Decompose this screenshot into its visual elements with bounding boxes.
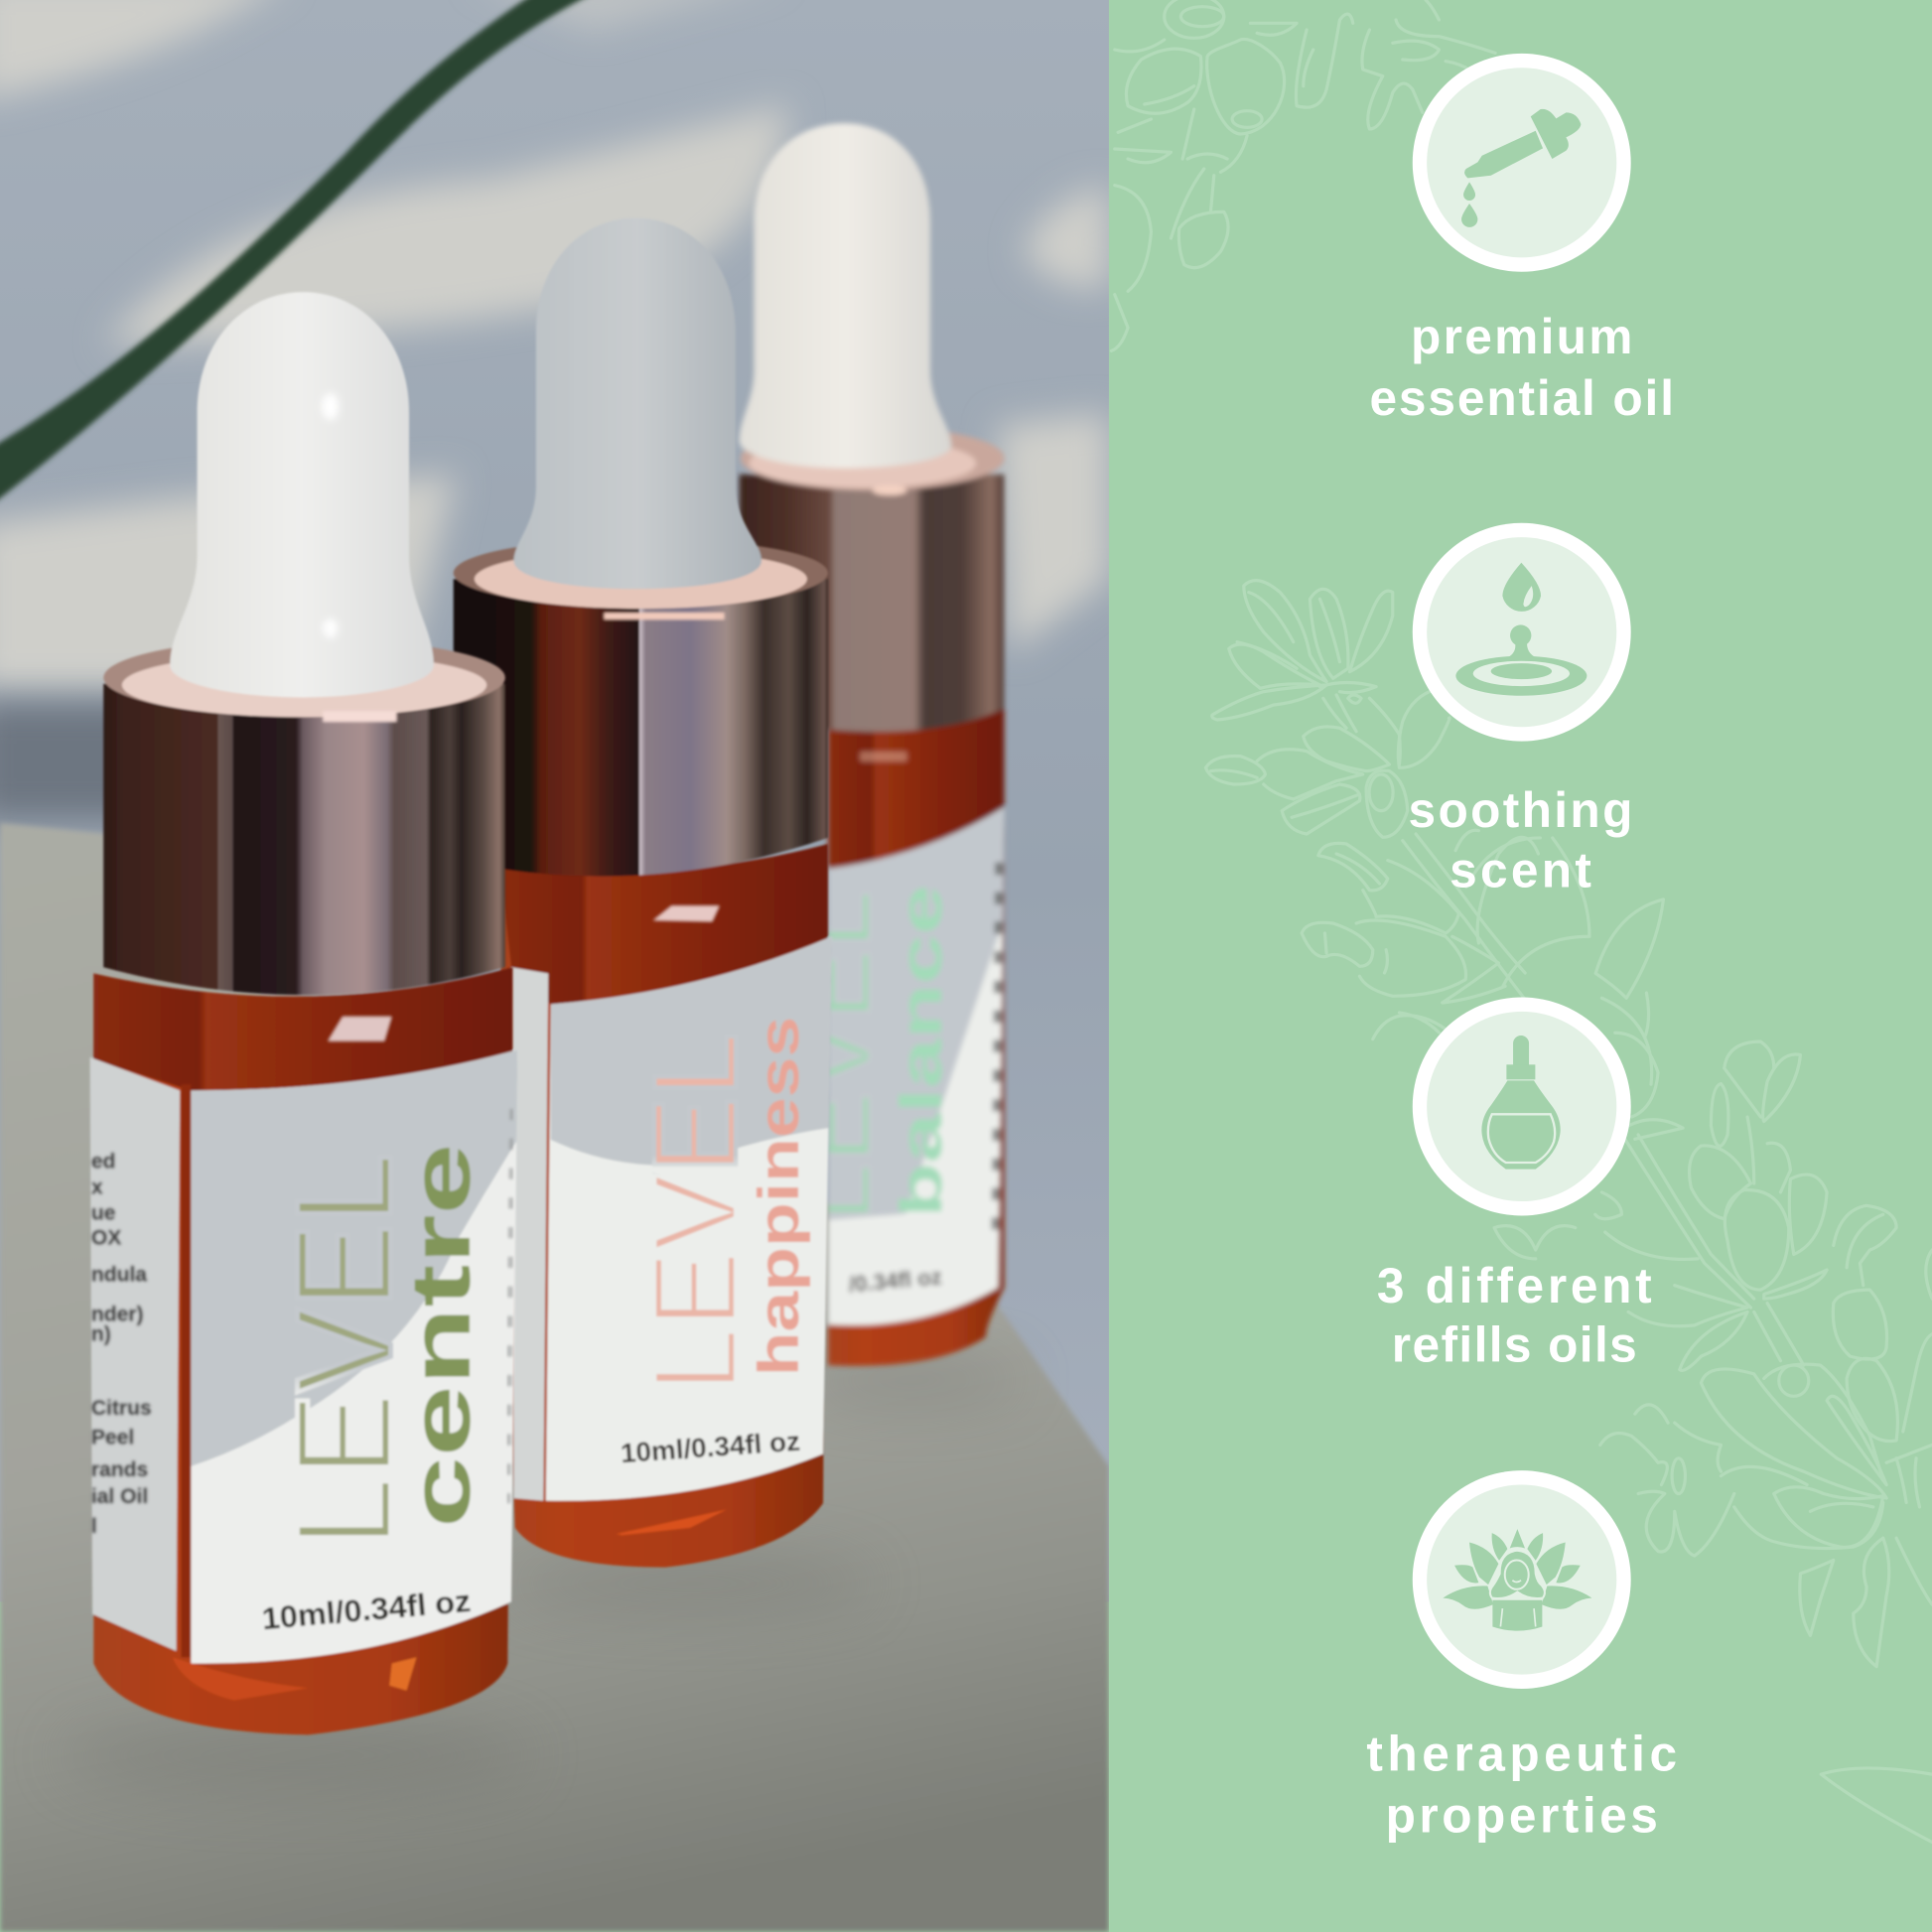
- front bottle edge text: [507, 1109, 512, 1503]
- green background: [1109, 0, 1932, 1932]
- front bottle side label text: nder): [91, 1303, 144, 1325]
- label: [1369, 309, 1674, 426]
- label: premium: [1411, 309, 1632, 364]
- floral line art: [1111, 0, 1932, 1842]
- back bottle label shadow: [828, 807, 1004, 1220]
- front bottle side label text: rands: [91, 1458, 148, 1481]
- front bottle side label text: Citrus: [91, 1397, 152, 1420]
- middle bottle volume: 10ml/0.34fl oz: [620, 1426, 801, 1468]
- middle branch: [1205, 581, 1538, 1039]
- badge circle: [1413, 998, 1631, 1215]
- front bottle side label text: ue: [91, 1202, 115, 1225]
- badge circle: [1413, 1470, 1631, 1689]
- front bottle glints: [328, 1017, 392, 1041]
- label: properties: [1386, 1787, 1658, 1843]
- benefit: 3 different refills oils: [1377, 998, 1652, 1372]
- front bottle side label text: ial Oil: [91, 1485, 148, 1508]
- branch upper right petals: [1466, 838, 1663, 1084]
- label: [1366, 1725, 1677, 1843]
- badge circle: [1413, 523, 1631, 742]
- label: refills oils: [1392, 1316, 1637, 1372]
- back bottle label text: [828, 860, 1007, 1295]
- back bottle glass: [824, 859, 1009, 1370]
- middle bottle side label: [511, 967, 548, 1501]
- middle bottle cap: [454, 579, 828, 877]
- front bottle side label text: [91, 1151, 152, 1538]
- middle bottle brand text: LEVEL: [629, 1033, 761, 1392]
- label: [1409, 782, 1632, 898]
- front bottle glass: [93, 967, 512, 1734]
- middle bottle label shadow: [551, 936, 832, 1166]
- middle bottle bulb: [514, 218, 761, 589]
- front bottle cap: [103, 684, 505, 995]
- back bottle label text: /0.34fl oz: [848, 1264, 943, 1297]
- front bottle bulb: [170, 292, 434, 697]
- back bottle label: [828, 807, 1004, 1325]
- front bottle side label text: ed: [91, 1151, 115, 1173]
- bottle: balance (back): [740, 123, 1004, 1366]
- label: [1377, 1258, 1652, 1372]
- plant stem: [0, 0, 604, 507]
- panel: benefits: [1109, 0, 1932, 1932]
- benefit: soothing scent: [1409, 523, 1632, 898]
- icon: dropper: [1461, 109, 1581, 227]
- lower right flowers: [1494, 993, 1932, 1667]
- bottle: happiness (middle): [454, 218, 832, 1568]
- wall shadow band: [0, 681, 105, 832]
- wall light patches: [0, 0, 1109, 690]
- bottle: centre (front): [90, 292, 517, 1734]
- icon: woman with lotus: [1443, 1529, 1591, 1631]
- benefit: premium essential oil: [1369, 54, 1674, 426]
- badge circle: [1413, 54, 1631, 272]
- label: scent: [1449, 843, 1591, 898]
- benefit: therapeutic properties: [1366, 1470, 1677, 1843]
- front bottle side label text: ndula: [91, 1264, 147, 1287]
- back bottle label text: balance: [888, 885, 954, 1217]
- front bottle side label text: n): [91, 1322, 111, 1345]
- back bottle cap: [740, 475, 1004, 732]
- front bottle side label text: OX: [91, 1226, 121, 1249]
- front bottle side label: [90, 1057, 180, 1651]
- wall background: [0, 0, 1109, 1601]
- label: soothing: [1409, 782, 1632, 838]
- table soft shadows: [145, 1364, 951, 1772]
- front bottle label shadow: [191, 1049, 517, 1466]
- label: 3 different: [1377, 1258, 1652, 1313]
- bottom right leaf: [1821, 1768, 1932, 1842]
- table top: [0, 823, 1109, 1932]
- front bottle label: [191, 1049, 517, 1664]
- front bottle product name: centre: [394, 1144, 487, 1528]
- middle bottle label: [546, 936, 832, 1501]
- middle bottle glass: [499, 844, 828, 1568]
- front bottle brand text: LEVEL: [267, 1154, 419, 1548]
- middle bottle glints: [617, 1509, 727, 1535]
- top left flowers: [1111, 0, 1495, 350]
- label: therapeutic: [1366, 1725, 1677, 1781]
- icon: oil bottle: [1481, 1035, 1561, 1170]
- middle bottle product name: happiness: [748, 1017, 811, 1376]
- back bottle label text: LEVEL: [773, 890, 893, 1222]
- front bottle side label text: Peel: [91, 1427, 134, 1449]
- front bottle side label text: l: [91, 1515, 97, 1538]
- front bottle volume: 10ml/0.34fl oz: [260, 1584, 473, 1636]
- back bottle bulb: [740, 123, 951, 469]
- panel: product photo: [0, 0, 1109, 1932]
- icon: water drop and ripple: [1455, 563, 1587, 696]
- front bottle side label text: x: [91, 1176, 103, 1199]
- label: essential oil: [1369, 370, 1674, 426]
